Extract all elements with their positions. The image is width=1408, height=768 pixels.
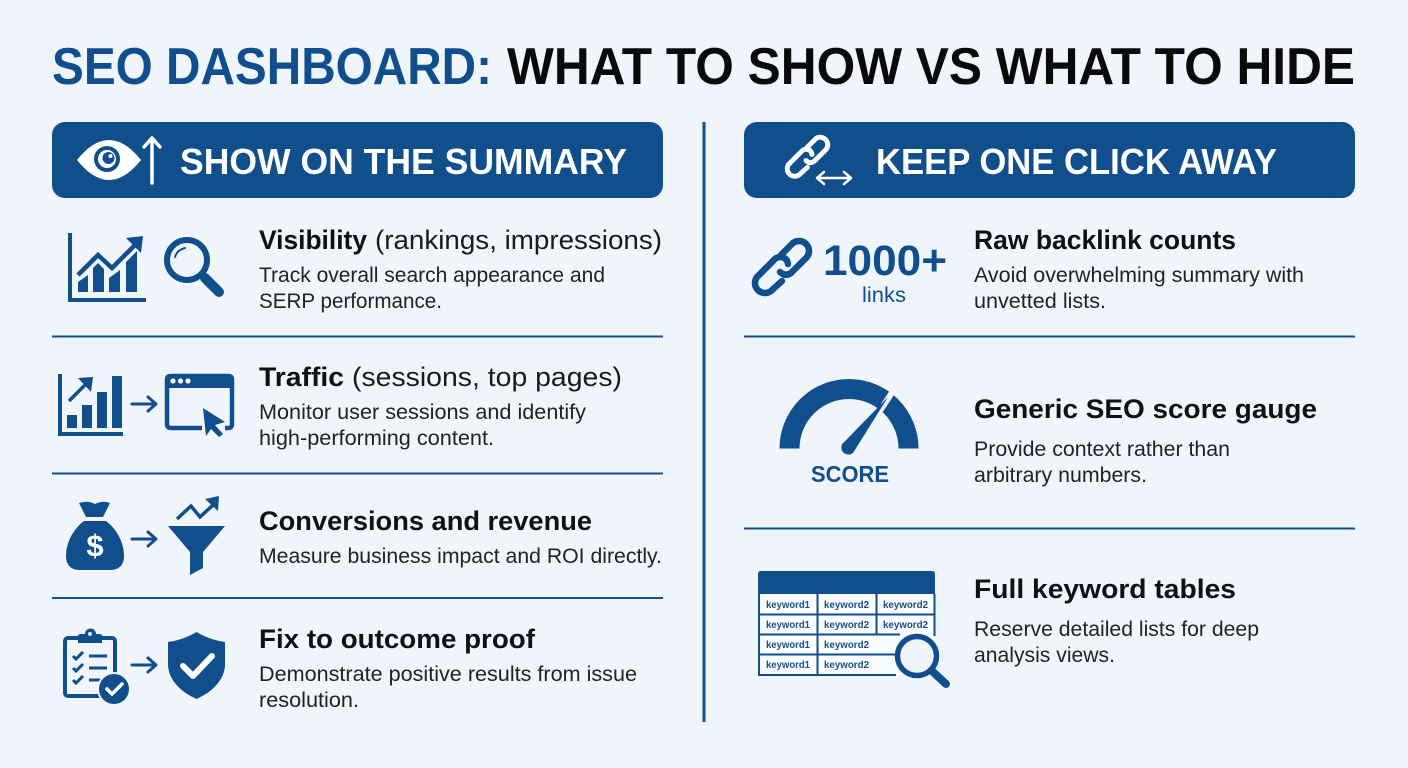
row: traffic [58, 362, 622, 450]
text: conversions and revenue [259, 506, 662, 568]
icon: keyword table with magnifier: keyword1 [766, 599, 810, 611]
text: conversions and revenue: Measure business impact and ROI directly. [259, 544, 662, 568]
text: conversions and revenue: Conversions and revenue [259, 506, 592, 536]
text: full keyword tables: Reserve detailed lists for deep [974, 617, 1259, 641]
text: traffic: (sessions, top pages) [352, 362, 622, 392]
text: visibility: SERP performance. [259, 289, 442, 313]
panel: keep one click away [744, 122, 1355, 684]
icon: checklist to shield [65, 628, 225, 706]
title: WHAT TO SHOW VS WHAT TO HIDE [507, 38, 1355, 96]
icon: keyword table with magnifier: keyword2 [883, 619, 928, 631]
icon: chart to browser window [58, 374, 234, 437]
icon: rising chart and magnifier [68, 233, 219, 302]
icon: score gauge [790, 389, 908, 487]
icon: chain with 1000+ links: 1000+ [823, 237, 947, 285]
text: raw backlink counts: Avoid overwhelming summary with [974, 263, 1304, 287]
row: visibility [68, 225, 662, 313]
icon: chain with 1000+ links [755, 237, 947, 307]
row: generic seo score gauge [790, 389, 1317, 487]
icon: keyword table with magnifier: keyword1 [766, 619, 810, 631]
text: visibility: (rankings, impressions) [375, 225, 662, 255]
text: raw backlink counts: unvetted lists. [974, 289, 1106, 313]
text: full keyword tables: Full keyword tables [974, 574, 1236, 604]
title: SEO DASHBOARD: [52, 38, 492, 96]
header: show on the summary: SHOW ON THE SUMMARY [180, 141, 627, 182]
row: full keyword tables [758, 571, 1259, 684]
icon: chain link with double arrow [787, 137, 851, 184]
icon: keyword table with magnifier: keyword2 [824, 659, 869, 671]
icon: money bag to funnel: $ [86, 528, 104, 563]
text: traffic [259, 362, 622, 450]
text: raw backlink counts: Raw backlink counts [974, 225, 1236, 255]
text: visibility [259, 225, 662, 313]
text: fix to outcome proof: resolution. [259, 688, 359, 712]
icon: keyword table with magnifier: keyword2 [824, 599, 869, 611]
text: generic seo score gauge [974, 394, 1317, 487]
text: full keyword tables: analysis views. [974, 643, 1115, 667]
panel: show on the summary [52, 122, 663, 712]
text: visibility: Visibility [259, 225, 367, 255]
row: conversions and revenue [66, 496, 662, 575]
text: traffic: Traffic [259, 362, 344, 392]
icon: keyword table with magnifier: keyword2 [824, 639, 869, 651]
title [52, 38, 1355, 96]
icon: chain with 1000+ links: links [862, 284, 906, 307]
text: visibility: Track overall search appearance and [259, 263, 605, 287]
icon: eye with up arrow [77, 138, 160, 183]
icon: keyword table with magnifier [758, 571, 946, 684]
text: generic seo score gauge: Provide context rather than [974, 437, 1230, 461]
icon: keyword table with magnifier: keyword1 [766, 639, 810, 651]
text: generic seo score gauge: arbitrary numbers. [974, 463, 1147, 487]
text: traffic: Monitor user sessions and identify [259, 400, 586, 424]
text: fix to outcome proof [259, 624, 637, 712]
icon: keyword table with magnifier: keyword2 [824, 619, 869, 631]
icon: score gauge: SCORE [811, 461, 889, 487]
text: raw backlink counts [974, 225, 1304, 313]
icon: money bag to funnel [66, 496, 225, 575]
text: fix to outcome proof: Fix to outcome proof [259, 624, 536, 654]
row: raw backlink counts [755, 225, 1304, 313]
text: generic seo score gauge: Generic SEO score gauge [974, 394, 1317, 424]
header: keep one click away [744, 122, 1355, 198]
icon: keyword table with magnifier: keyword2 [883, 599, 928, 611]
text: traffic: high-performing content. [259, 426, 494, 450]
text: fix to outcome proof: Demonstrate positive results from issue [259, 662, 637, 686]
icon: keyword table with magnifier: keyword1 [766, 659, 810, 671]
header: show on the summary [52, 122, 663, 198]
row: fix to outcome proof [65, 624, 637, 712]
text: full keyword tables [974, 574, 1259, 667]
header: keep one click away: KEEP ONE CLICK AWAY [876, 141, 1277, 182]
